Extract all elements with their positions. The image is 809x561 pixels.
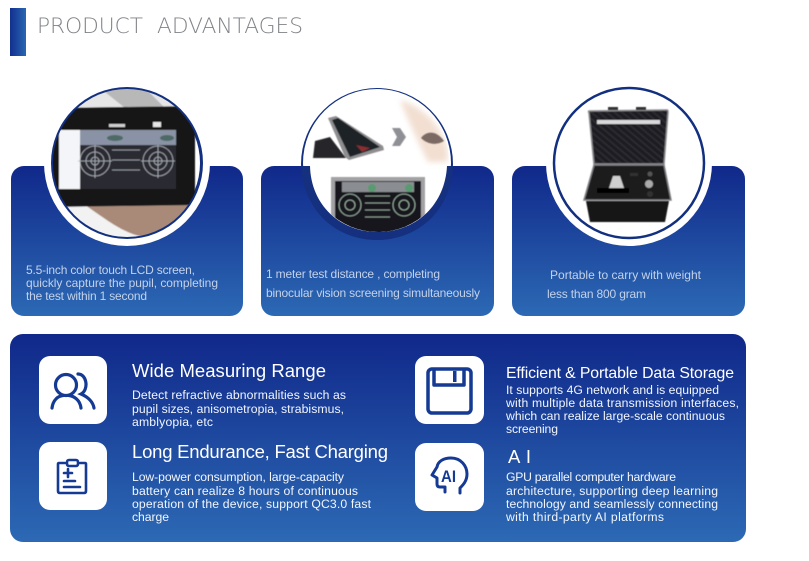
feature: long endurance: Low-power consumption, large-capacity — [132, 470, 345, 484]
feature: wide measuring range — [132, 360, 346, 429]
icon: people — [39, 356, 107, 424]
feature: AI: GPU parallel computer hardware — [506, 470, 676, 484]
feature: data storage — [505, 365, 739, 436]
feature: data storage: It supports 4G network and is equipped — [506, 383, 719, 397]
caption: 1 meter test distance , completing — [266, 267, 440, 281]
feature: wide measuring range: Detect refractive abnormalities such as — [132, 388, 346, 402]
caption — [547, 268, 702, 301]
feature: data storage: which can realize large-scale continuous — [505, 409, 725, 423]
feature: AI: A I — [508, 446, 531, 467]
icon: AI head — [415, 443, 484, 511]
feature: long endurance: charge — [132, 510, 169, 524]
feature: data storage: with multiple data transmission interfaces, — [505, 396, 739, 410]
feature: long endurance: Long Endurance, Fast Charging — [132, 441, 388, 462]
feature: wide measuring range: Wide Measuring Range — [132, 360, 326, 381]
caption: the test within 1 second — [26, 289, 147, 303]
feature: data storage: Efficient & Portable Data Storage — [506, 365, 734, 382]
caption — [26, 263, 218, 303]
icon: clipboard — [39, 442, 107, 510]
caption — [266, 267, 480, 300]
title: PRODUCT — [37, 14, 143, 38]
feature: wide measuring range: pupil sizes, anisometropia, strabismus, — [132, 402, 344, 416]
image: handheld screen in circle — [44, 80, 210, 246]
caption: 5.5-inch color touch LCD screen, — [26, 263, 195, 277]
feature: AI — [505, 446, 718, 524]
feature: long endurance — [132, 441, 388, 524]
icon: AI head: AI — [441, 467, 456, 486]
title — [37, 14, 303, 38]
image: test distance in circle — [301, 88, 453, 240]
feature: long endurance: battery can realize 8 hours of continuous — [132, 484, 358, 498]
caption: Portable to carry with weight — [550, 268, 702, 282]
feature: AI: with third-party AI platforms — [505, 510, 664, 524]
caption: binocular vision screening simultaneously — [266, 286, 480, 300]
title accent bar — [10, 8, 26, 56]
title: ADVANTAGES — [157, 14, 303, 38]
panel: distance card — [261, 88, 494, 316]
panel: portable card — [512, 80, 745, 316]
feature: wide measuring range: amblyopia, etc — [132, 415, 213, 429]
feature: AI: architecture, supporting deep learning — [506, 484, 718, 498]
icon: floppy disk — [415, 356, 484, 424]
feature: AI: technology and seamlessly connecting — [506, 497, 718, 511]
panel: features — [10, 334, 746, 542]
caption: quickly capture the pupil, completing — [26, 276, 218, 290]
caption: less than 800 gram — [547, 287, 646, 301]
feature: data storage: screening — [506, 422, 558, 436]
image: carrying case in circle — [546, 80, 712, 246]
panel: screen card — [11, 80, 243, 316]
feature: long endurance: operation of the device, support QC3.0 fast — [132, 497, 372, 511]
